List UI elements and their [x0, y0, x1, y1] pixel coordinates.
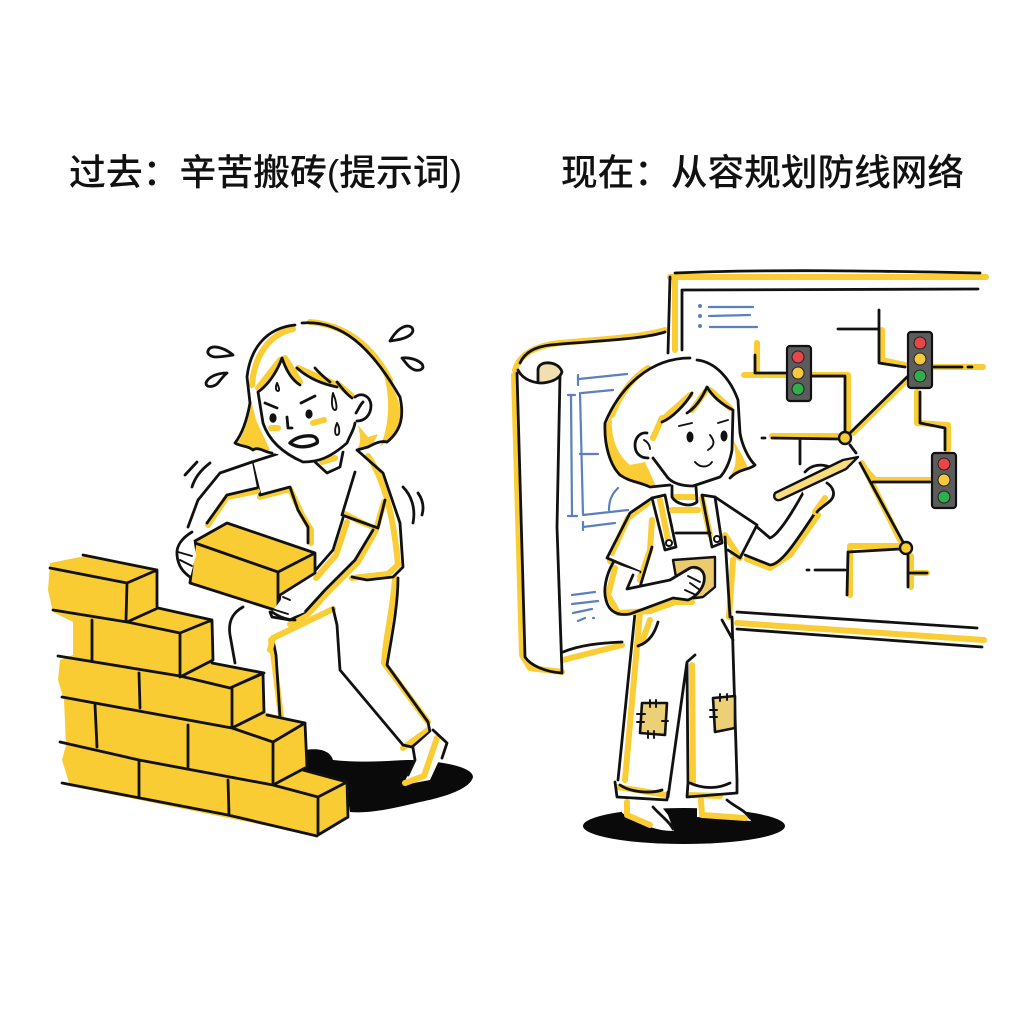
- knee patch left: [637, 700, 668, 738]
- overalls: [615, 533, 737, 800]
- right arm: [745, 493, 818, 568]
- hair and head: [235, 322, 402, 454]
- pencil: [774, 457, 858, 500]
- mouth: [290, 436, 317, 447]
- foot: [403, 730, 447, 785]
- shirt and torso: [252, 450, 403, 600]
- left arm: [188, 462, 257, 527]
- traffic light 1: [787, 346, 811, 401]
- pocket note: [673, 557, 715, 600]
- sweat drops in air: [206, 326, 423, 386]
- board legend: [698, 304, 757, 328]
- heading: present: 现在：从容规划防线网络: [561, 152, 964, 193]
- hair: [605, 358, 755, 487]
- illustration: past, woman carrying bricks: [48, 322, 473, 836]
- network lines: [744, 310, 983, 595]
- blueprint lines: [568, 374, 628, 621]
- scroll blueprint: [514, 330, 665, 673]
- ground shadow: [583, 808, 785, 844]
- neck: [322, 458, 335, 462]
- pointing hand: [802, 463, 835, 513]
- traffic light 2: [908, 332, 932, 388]
- right arm: [270, 518, 375, 624]
- front leg and trousers: [270, 578, 430, 748]
- neck: [672, 485, 698, 510]
- shirt: [607, 497, 757, 580]
- overall straps: [640, 495, 730, 617]
- knee patch right: [710, 694, 735, 732]
- network node 1: [839, 432, 851, 444]
- carried brick: [190, 523, 315, 611]
- ear: [635, 433, 648, 458]
- network node 2: [900, 542, 912, 554]
- traffic light 3: [932, 453, 956, 508]
- eyes: [686, 432, 694, 442]
- scroll roll end: [537, 363, 562, 382]
- whiteboard frame: [668, 271, 986, 647]
- ground shadow: [300, 749, 473, 812]
- left arm and hand: [605, 563, 705, 615]
- brows and nose: [265, 396, 315, 428]
- back leg: [230, 607, 300, 717]
- cheeks: [271, 420, 324, 428]
- hands: [177, 532, 305, 620]
- illustration: present, board and planner: [514, 271, 986, 844]
- motion lines: [185, 462, 423, 523]
- face: [635, 387, 733, 486]
- ear: [355, 397, 370, 422]
- brows, nose, smile: [679, 420, 728, 466]
- shoes: [622, 796, 751, 831]
- heading: past: 过去：辛苦搬砖(提示词): [69, 152, 462, 193]
- planner girl: [605, 358, 858, 831]
- eyes: [269, 413, 277, 423]
- brick wall: [48, 555, 348, 836]
- sweat on face: [276, 383, 339, 435]
- face: [258, 358, 371, 462]
